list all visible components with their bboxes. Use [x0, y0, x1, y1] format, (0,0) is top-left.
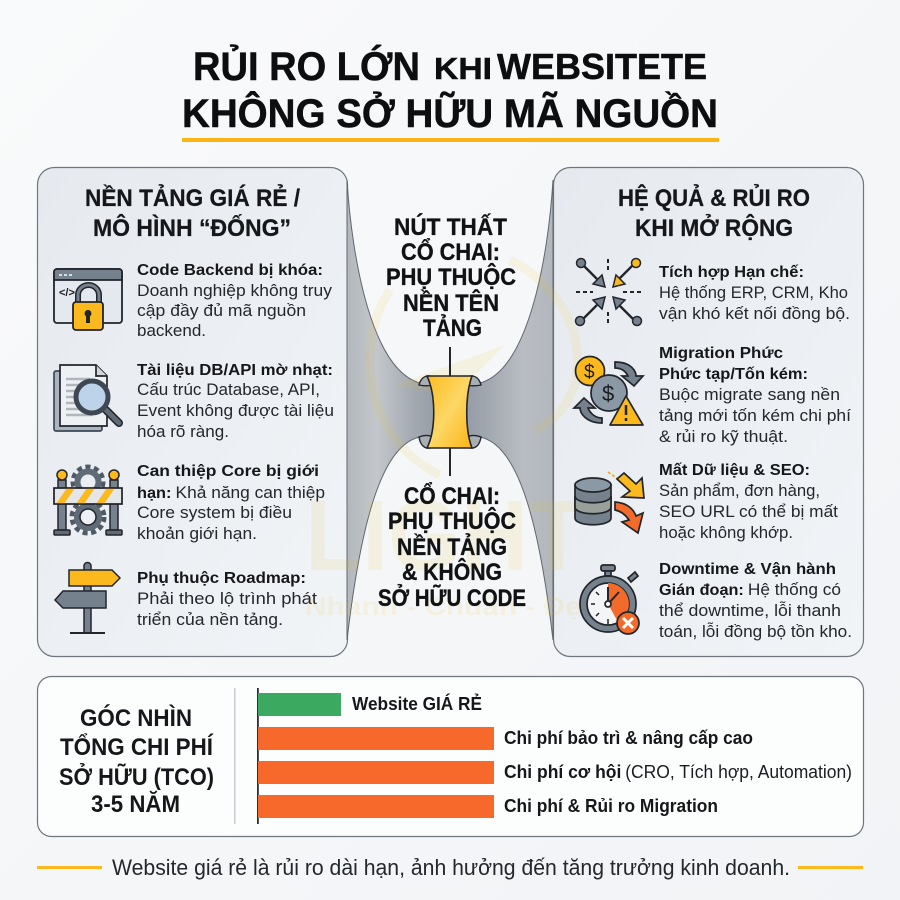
text: migration: & rủi ro kỹ thuật. [659, 427, 788, 446]
center label: top: CỔ CHAI: [401, 238, 500, 266]
text: code backend: Code Backend bị khóa: [137, 262, 323, 279]
icon: database with falling arrows [575, 472, 644, 533]
text: database api: Event không được tài liệu [137, 401, 334, 420]
text: data seo [659, 462, 838, 542]
center label: top: NÚT THẤT [394, 213, 507, 241]
panel: tco [38, 676, 864, 836]
title [182, 43, 719, 142]
text: downtime: thể downtime, lỗi thanh [659, 601, 841, 620]
watermark: Nhanh - Chuẩn - Đẹp [305, 591, 600, 621]
footer note: Website giá rẻ là rủi ro dài hạn, ảnh hưởng đến tăng trưởng kinh doanh. [112, 855, 790, 880]
text: migration [659, 345, 851, 446]
bar: migration [258, 795, 718, 818]
icon: barrier with gears [54, 467, 122, 535]
text: core: Can thiệp Core bị giới [137, 463, 319, 480]
icon: coins with warning [574, 356, 643, 425]
connector: lower [449, 448, 451, 476]
bottleneck cylinder [419, 376, 481, 448]
heading: right panel [618, 183, 810, 242]
text: core: Core system bị điều [137, 503, 292, 522]
text: migration: Migration Phức [659, 345, 783, 362]
title: KHI [434, 51, 492, 86]
text: database api: Cấu trúc Database, API, [137, 380, 320, 399]
text: roadmap [137, 570, 317, 629]
heading: right panel: HỆ QUẢ & RỦI RO [618, 183, 810, 212]
text: migration: Buộc migrate sang nền [659, 385, 840, 404]
text: core [137, 463, 325, 543]
tco heading [59, 704, 214, 818]
title: KHÔNG SỞ HỮU MÃ NGUỒN [182, 90, 718, 136]
bar: bao tri [258, 727, 753, 750]
bar: migration: Chi phí & Rủi ro Migration [504, 796, 718, 816]
icon: browser with padlock: </> [59, 287, 75, 299]
center label: bottom: PHỤ THUỘC [388, 507, 516, 535]
text: code backend: cập đầy đủ mã nguồn [137, 301, 306, 320]
center label: top [386, 213, 516, 342]
heading: left panel [85, 183, 300, 242]
tco heading: GÓC NHÌN [80, 704, 192, 732]
center label: bottom: CỔ CHAI: [404, 482, 500, 510]
bar: co hoi: Chi phí cơ hội(CRO, Tích hợp, Automation) [504, 762, 852, 782]
text: integration: Hệ thống ERP, CRM, Kho [659, 283, 848, 302]
bar chart [257, 688, 852, 824]
icon: browser with padlock [54, 269, 122, 330]
bar: co hoi [258, 761, 852, 784]
icon: coins with warning: $ [584, 362, 595, 383]
icon: stopwatch [580, 565, 639, 634]
tco heading: 3-5 NĂM [91, 790, 180, 818]
bar: bao tri: Chi phí bảo trì & nâng cấp cao [504, 728, 753, 748]
center label: bottom: NỀN TẢNG [397, 532, 507, 561]
text: downtime: Downtime & Vận hành [659, 561, 836, 578]
title: RỦI RO LỚN [193, 43, 420, 89]
connector: upper [449, 347, 451, 376]
tco heading: TỔNG CHI PHÍ [60, 733, 214, 761]
center label: bottom: & KHÔNG [402, 558, 502, 586]
text: data seo: hoặc không khớp. [659, 523, 793, 542]
bar: website gia re [258, 693, 482, 716]
text: downtime: Gián đoạn: Hệ thống có [659, 580, 841, 599]
tco heading: SỞ HỮU (TCO) [59, 762, 214, 791]
title: WEBSITETE [497, 46, 707, 87]
text: migration: Phức tạp/Tốn kém: [659, 366, 808, 383]
text: downtime: toán, lỗi đồng bộ tồn kho. [659, 622, 852, 641]
text: code backend [137, 262, 333, 340]
text: database api: hóa rõ ràng. [137, 422, 229, 441]
text: data seo: SEO URL có thể bị mất [659, 502, 838, 521]
panel: right background [554, 168, 864, 656]
icon: converging arrows [576, 258, 642, 326]
text: data seo: Sản phẩm, đơn hàng, [659, 481, 820, 500]
text: database api: Tài liệu DB/API mờ nhạt: [137, 362, 333, 379]
bottleneck funnel [347, 180, 553, 640]
panel: left background [38, 168, 348, 656]
text: integration [659, 264, 850, 323]
center label: bottom [378, 482, 526, 612]
text: roadmap: Phải theo lộ trình phát [137, 589, 317, 608]
text: database api [137, 362, 334, 441]
center label: top: PHỤ THUỘC [386, 263, 516, 291]
center label: bottom: SỞ HỮU CODE [378, 583, 526, 612]
icon: document with magnifier [54, 365, 119, 431]
text: integration: Tích hợp Hạn chế: [659, 264, 804, 281]
text: core: hạn: Khả năng can thiệp [137, 483, 325, 502]
text: roadmap: Phụ thuộc Roadmap: [137, 570, 306, 587]
icon: signpost [55, 562, 120, 633]
watermark [305, 260, 600, 621]
watermark: LIGHT [305, 480, 585, 592]
heading: right panel: KHI MỞ RỘNG [635, 213, 793, 242]
heading: left panel: MÔ HÌNH “ĐỐNG” [93, 214, 291, 242]
bar: website gia re: Website GIÁ RẺ [352, 693, 482, 714]
text: core: khoản giới hạn. [137, 524, 257, 543]
icon: coins with warning: $ [602, 381, 614, 406]
text: downtime [659, 561, 852, 641]
text: code backend: backend. [137, 321, 206, 340]
text: data seo: Mất Dữ liệu & SEO: [659, 462, 810, 479]
heading: left panel: NỀN TẢNG GIÁ RẺ / [85, 183, 300, 212]
center label: top: TẢNG [423, 313, 482, 342]
text: roadmap: triển của nền tảng. [137, 610, 283, 629]
text: code backend: Doanh nghiệp không truy [137, 281, 333, 300]
text: migration: tảng mới tốn kém chi phí [659, 406, 851, 425]
center label: top: NỀN TÊN [403, 289, 499, 317]
text: integration: vận khó kết nối đồng bộ. [659, 304, 850, 323]
